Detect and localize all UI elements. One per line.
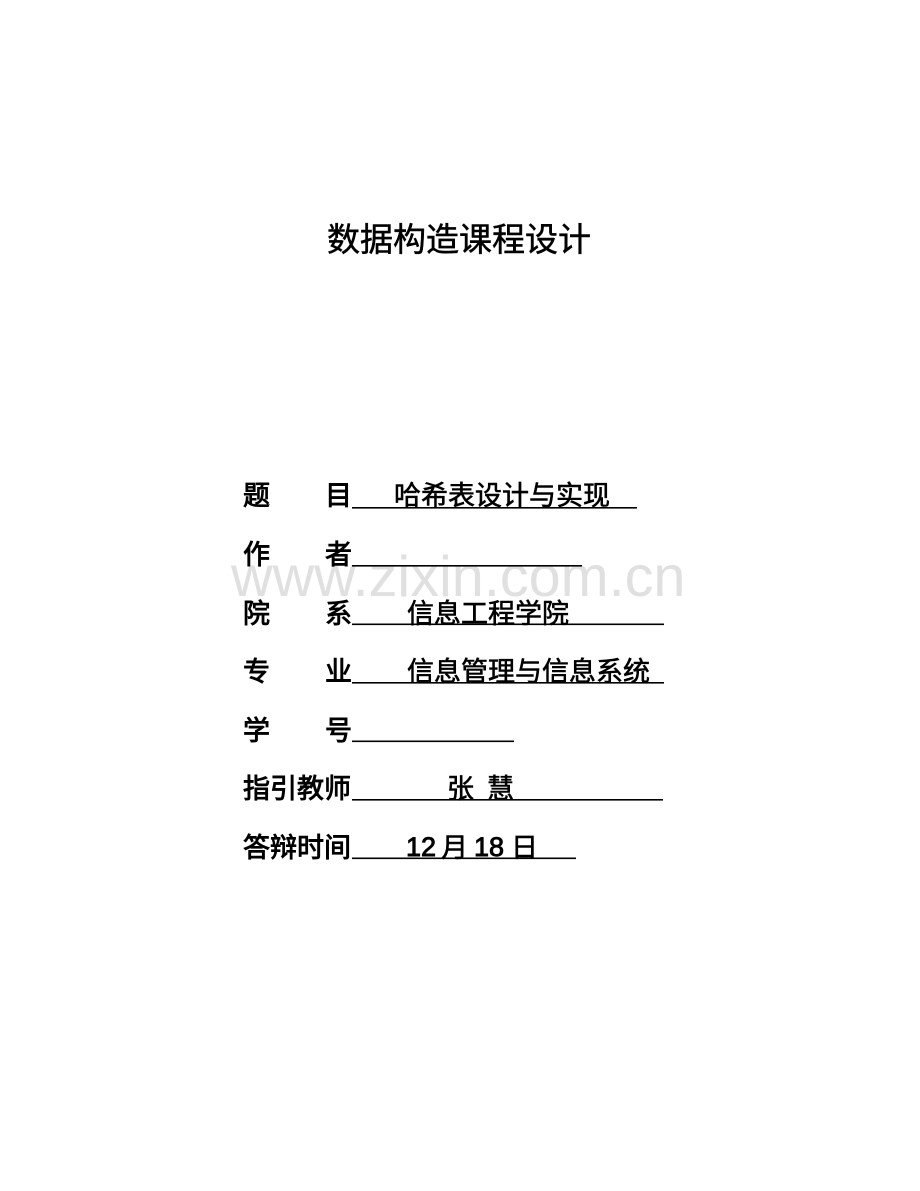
field: 题目: 哈希表设计与实现 — [394, 481, 610, 511]
field: 答辩时间: 18 — [474, 832, 504, 862]
field: 指引教师: 指引教师 — [243, 774, 351, 804]
field: 专业: 信息管理与信息系统 — [407, 657, 650, 687]
field: 答辩时间 — [243, 832, 576, 863]
field: 专业 — [243, 657, 664, 687]
field: 答辩时间: 日 — [511, 833, 538, 863]
field: 题目: 目 — [325, 481, 352, 511]
field: 作者: 作 — [243, 540, 270, 570]
field: 答辩时间: 12 — [406, 832, 436, 862]
field: 题目: 题 — [243, 481, 270, 511]
field: 答辩时间: 月 — [441, 833, 468, 863]
field: 院系: 系 — [325, 599, 352, 629]
field: 答辩时间: 答辩时间 — [243, 833, 351, 863]
watermark: www.zixin.com.cn — [230, 545, 685, 609]
field: 学号: 学 — [243, 716, 270, 746]
title: 数据构造课程设计 — [327, 221, 591, 258]
field: 院系: 院 — [243, 599, 270, 629]
field: 指引教师 — [243, 774, 663, 804]
field: 院系 — [243, 599, 664, 629]
field: 学号: 号 — [325, 716, 352, 746]
field: 专业: 专 — [243, 657, 270, 687]
field: 指引教师: 慧 — [487, 774, 514, 804]
form fields — [243, 481, 664, 863]
field: 作者 — [243, 540, 582, 570]
field: 院系: 信息工程学院 — [407, 599, 569, 629]
field: 学号 — [243, 716, 514, 746]
field: 题目 — [243, 481, 637, 511]
field: 专业: 业 — [325, 657, 352, 687]
field: 指引教师: 张 — [447, 774, 474, 804]
field: 作者: 者 — [325, 540, 352, 570]
